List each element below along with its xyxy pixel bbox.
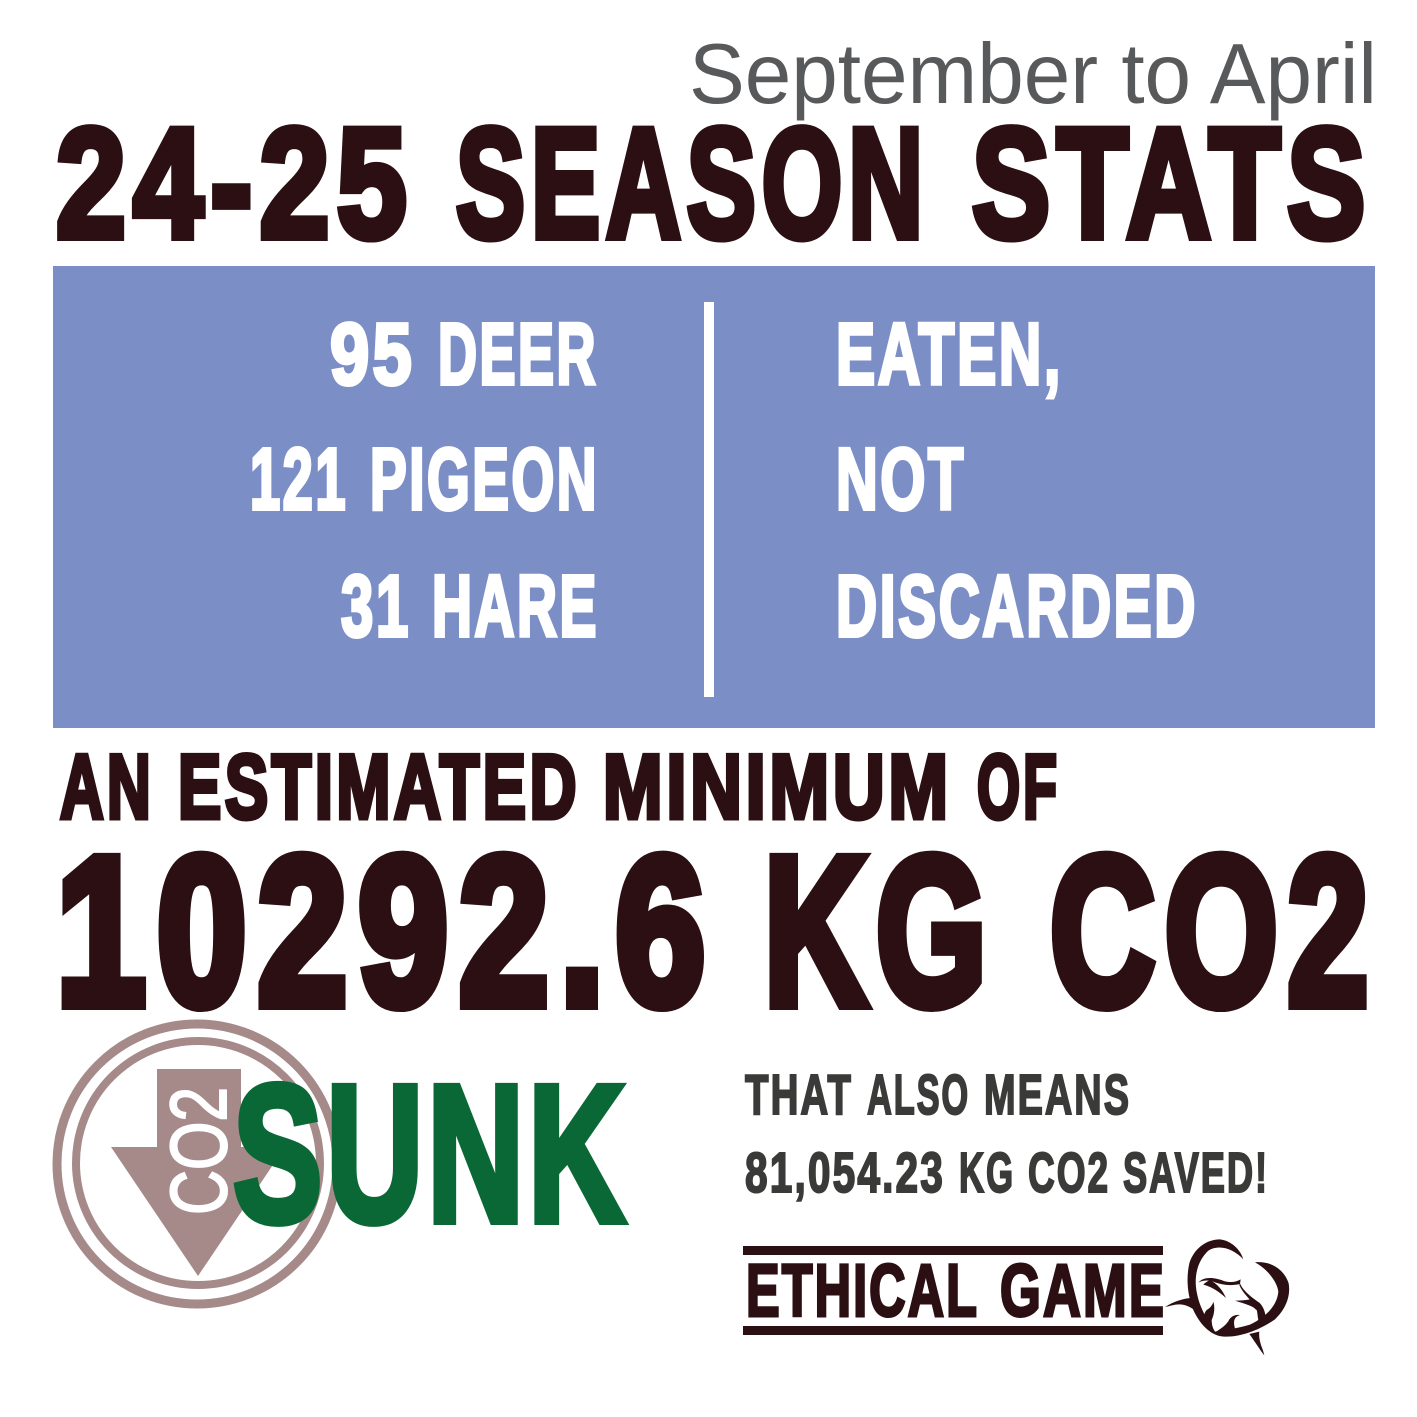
stat: deer: DEER (438, 306, 598, 403)
title (56, 97, 1372, 271)
stat: pigeon: 121 (250, 431, 348, 528)
text: CO2 saved: KG (959, 1141, 1015, 1205)
stat: hare (341, 558, 599, 655)
text: that also means: ALSO (867, 1063, 970, 1127)
top rule (743, 1246, 1163, 1255)
stat: hare: 31 (341, 558, 411, 655)
text: that also means (745, 1063, 1131, 1127)
title: 24-25 (56, 97, 414, 271)
title: SEASON (456, 97, 929, 271)
heading: estimated minimum: ESTIMATED (178, 737, 580, 838)
stat: pigeon: PIGEON (370, 431, 599, 528)
inner ring (76, 1041, 320, 1285)
stat: pigeon (250, 431, 599, 528)
text: that also means: MEANS (984, 1063, 1131, 1127)
heading: estimated minimum (60, 737, 1060, 838)
text: CO2 saved (745, 1141, 1269, 1205)
text: CO2 saved: 81,054.23 (745, 1141, 945, 1205)
outer ring (57, 1024, 337, 1304)
headline figure: CO2 total (56, 813, 1378, 1049)
text: not: NOT (836, 431, 966, 528)
bottom rule (743, 1326, 1163, 1335)
panel background (53, 266, 1375, 728)
heading: estimated minimum: MINIMUM (603, 737, 952, 838)
headline figure: CO2 total: KG (764, 813, 996, 1049)
logo wordmark: GAME (1000, 1249, 1166, 1332)
stat: hare: HARE (432, 558, 599, 655)
arrow label: CO2 (154, 1087, 243, 1215)
text: CO2 saved: CO2 (1028, 1141, 1110, 1205)
text: eaten: EATEN, (836, 306, 1063, 403)
icon: CO2 sunk badge (57, 1024, 337, 1304)
stat: deer (330, 306, 598, 403)
wordmark: sunk: SUNK (233, 1045, 629, 1263)
heading: estimated minimum: OF (977, 737, 1060, 838)
panel: harvest stats (53, 266, 1375, 728)
logo wordmark: ETHICAL (746, 1249, 979, 1332)
subtitle: date range: September to April (689, 27, 1377, 122)
divider (704, 302, 714, 697)
text: discarded: DISCARDED (836, 558, 1198, 655)
heading: estimated minimum: AN (60, 737, 154, 838)
headline figure: CO2 total: 10292.6 (56, 813, 716, 1049)
text: that also means: THAT (745, 1063, 853, 1127)
down arrow (111, 1069, 285, 1276)
text: CO2 saved: SAVED! (1123, 1141, 1269, 1205)
logo: ethical game (743, 1239, 1289, 1355)
stat: deer: 95 (330, 306, 415, 403)
icon: animal head emblem (1165, 1239, 1289, 1355)
